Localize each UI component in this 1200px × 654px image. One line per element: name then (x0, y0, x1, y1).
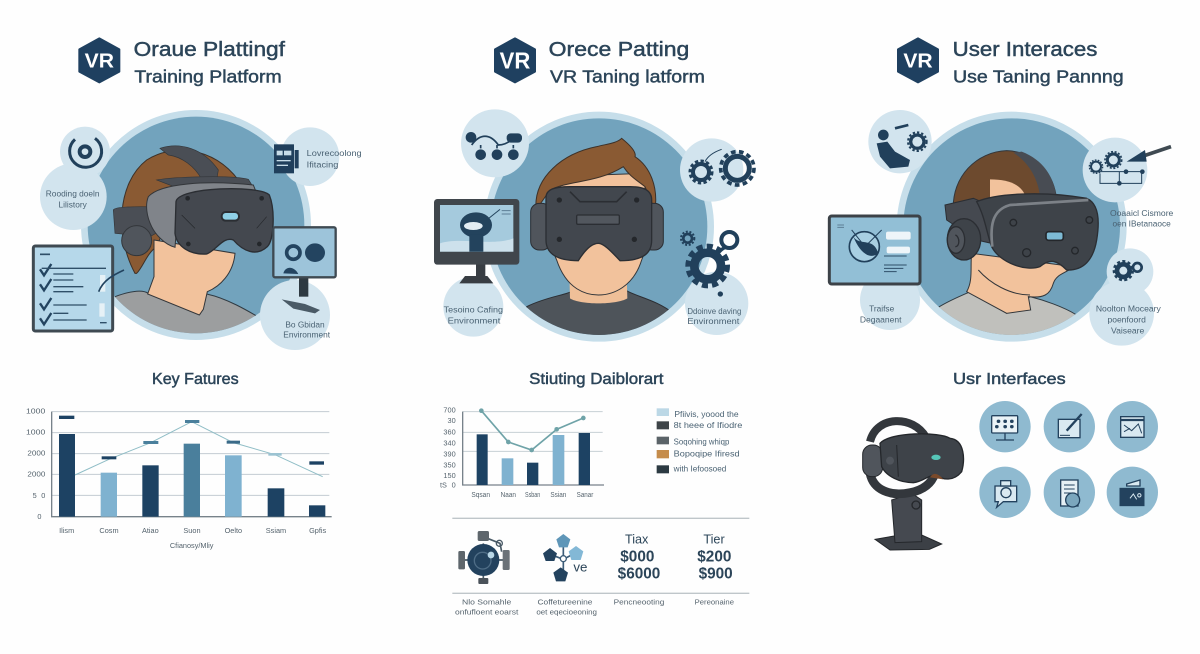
label: environment: Bo Gbidan (285, 319, 325, 329)
illustration: head with angled VR headset (860, 110, 1154, 347)
icon circle: calendar chart (1107, 401, 1158, 452)
y-axis labels: 5 0 (33, 491, 45, 500)
panel: dashboard chart (440, 371, 743, 499)
label: device environment: Ddoinve daving (687, 306, 742, 316)
title: user interaces: User Interaces (953, 39, 1097, 61)
monitor: robot headset (434, 199, 519, 283)
icon: person with gears (877, 125, 927, 168)
label: control center: Ooaaicl Cismore (1110, 208, 1174, 218)
pricing: tiax: Tiax (625, 532, 649, 546)
heading: usr interfaces: Usr Interfaces (953, 371, 1066, 388)
icon: headset hub (458, 531, 510, 584)
y-axis labels: 0 (452, 481, 456, 490)
legend: with Iefoosoed (673, 463, 727, 473)
y-axis labels: 350 (443, 460, 456, 469)
logo: VR hexagon (898, 38, 938, 82)
panel: key features chart (26, 371, 332, 550)
x-axis labels: Ilism (59, 526, 74, 535)
caption labels: oet eqecioeoning (536, 608, 597, 617)
icon: hexagon network: ve (573, 560, 587, 575)
icon circle: camera speech bubble (979, 467, 1031, 518)
y-axis labels: 2000 (27, 470, 45, 479)
pricing: tier: $200 (697, 549, 731, 566)
legend: Pfiivis, yoood the (674, 409, 739, 419)
label: monitor memory values: Vaiseare (1111, 326, 1145, 336)
logo: VR hexagon: VR (500, 48, 530, 74)
icon circle: pencil and panel (1044, 401, 1095, 452)
pricing: tiax: $000 (620, 549, 654, 566)
illustration: VR headset on stand (863, 421, 963, 550)
logo: VR hexagon: VR (903, 50, 933, 73)
label: monitor memory values: poenfoord (1107, 314, 1146, 324)
illustration: head with side-view VR headset (40, 110, 339, 350)
label: training environment: Environment (448, 315, 501, 325)
legend: 8t heee of Ifiodre (674, 420, 743, 430)
label: environment (283, 319, 331, 340)
caption labels: onfufloent eoarst (455, 608, 518, 617)
caption labels: Coffetureenine (537, 597, 592, 606)
label: monitor memory values (1096, 303, 1162, 336)
x-axis labels: Naan (501, 490, 516, 499)
icon: gears with pen and circuit (1089, 147, 1171, 186)
heading: key fatures: Key Fatures (152, 371, 239, 388)
panel: pricing row (452, 518, 749, 617)
y-axis labels (26, 406, 45, 521)
y-axis labels: 2000 (27, 449, 45, 458)
caption labels (455, 597, 734, 617)
subtitle: training platform: Training Platform (134, 67, 282, 87)
panel: user interfaces (829, 38, 1174, 347)
x-axis labels (59, 526, 327, 550)
caption labels: Pereonaine (695, 598, 734, 607)
icon circle: document (1044, 467, 1095, 518)
pricing: tier (697, 532, 733, 582)
x-axis labels: Suon (183, 526, 201, 535)
icon: large gear cluster (681, 232, 737, 297)
x-axis labels: Ssban (525, 490, 540, 499)
logo: VR hexagon (79, 38, 119, 82)
illustration: front-facing head with VR headset (443, 109, 748, 347)
x-axis labels: Sanar (577, 490, 594, 499)
label: library: Lilistory (59, 200, 88, 210)
icon: two gears (690, 149, 754, 185)
caption labels: Nlo Somahle (462, 597, 511, 606)
icon: document (274, 144, 299, 173)
y-axis labels: 1000 (26, 428, 45, 437)
tablet: globe and messages (829, 216, 920, 284)
label: control center (1110, 208, 1174, 229)
y-axis labels: 390 (443, 449, 456, 458)
label: learning: Ifitacing (307, 159, 339, 169)
label: device environment: Environment (687, 316, 740, 326)
logo: VR hexagon (495, 38, 535, 82)
label: library (46, 189, 100, 210)
legend: Bopoqipe Ifiresd (674, 449, 740, 459)
bar chart (52, 412, 332, 517)
panel: orece patting (434, 38, 754, 347)
label: training department: Degaanent (860, 314, 902, 324)
label: device environment (687, 306, 742, 326)
panel: user interfaces bottom (863, 371, 1158, 550)
label: training department: Traifse (869, 304, 895, 314)
legend: Soqohing whiqp (674, 437, 730, 447)
x-axis labels: Ssiam (266, 526, 286, 535)
y-axis labels: 1000 (26, 406, 45, 415)
y-axis labels: tS (440, 481, 447, 490)
y-axis labels: 360 (443, 428, 456, 437)
monitor: gear and keyboard (273, 227, 336, 313)
subtitle: VR taning latform: VR Taning latform (550, 67, 705, 87)
x-axis labels: Oelto (225, 526, 242, 535)
label: learning (307, 148, 362, 169)
icon: hexagon network (543, 534, 587, 581)
label: monitor memory values: Noolton Moceary (1096, 303, 1162, 313)
y-axis labels: 150 (443, 471, 456, 480)
pricing: tiax (618, 532, 660, 582)
x-axis labels (471, 490, 594, 499)
legend (657, 408, 743, 473)
icon circle: package terminal (1107, 467, 1158, 518)
combo chart (463, 408, 604, 485)
label: learning: Lovrecoolong (307, 148, 362, 158)
heading: stiuting dabiblorart: Stiuting Daiblorart (529, 371, 664, 388)
subtitle: use taning panning: Use Taning Pannng (953, 67, 1124, 87)
rule lines (452, 518, 749, 593)
icon: gear pair (1114, 261, 1142, 280)
y-axis labels: 700 (443, 405, 456, 414)
label: training department (860, 304, 902, 324)
pricing: tier: $900 (699, 565, 733, 582)
x-axis labels: Atiao (142, 526, 159, 535)
title: oraue plattingf: Oraue Plattingf (134, 39, 285, 61)
icon: node network (466, 132, 522, 160)
label: control center: oen IBetanaoce (1112, 219, 1171, 229)
icon: gear ring (70, 138, 102, 167)
label: library: Rooding doeln (46, 189, 100, 199)
icon circle: dashboard monitor (979, 401, 1031, 452)
label: environment: Environment (283, 330, 331, 340)
caption labels: Pencneooting (614, 598, 664, 607)
title: orece patting: Orece Patting (549, 39, 689, 61)
y-axis labels (440, 405, 456, 490)
x-axis labels: Gpfis (309, 526, 327, 535)
pricing: tiax: $6000 (618, 565, 660, 582)
pricing: tier: Tier (703, 532, 725, 546)
y-axis labels: 340 (443, 439, 456, 448)
panel: oraue platform (33, 38, 362, 350)
x-axis labels: Ssian (550, 490, 566, 499)
x-axis labels: Sqsan (471, 490, 490, 499)
logo: VR hexagon: VR (85, 50, 114, 73)
x-axis labels: Cosm (99, 526, 119, 535)
tablet: checklist (33, 246, 124, 331)
label: training environment: Tesoino Cafing (444, 305, 503, 315)
x-axis labels: Cfianosy/Mliy (170, 541, 214, 550)
y-axis labels: 30 (448, 416, 456, 425)
label: training environment (444, 305, 503, 325)
y-axis labels: 0 (37, 512, 41, 521)
